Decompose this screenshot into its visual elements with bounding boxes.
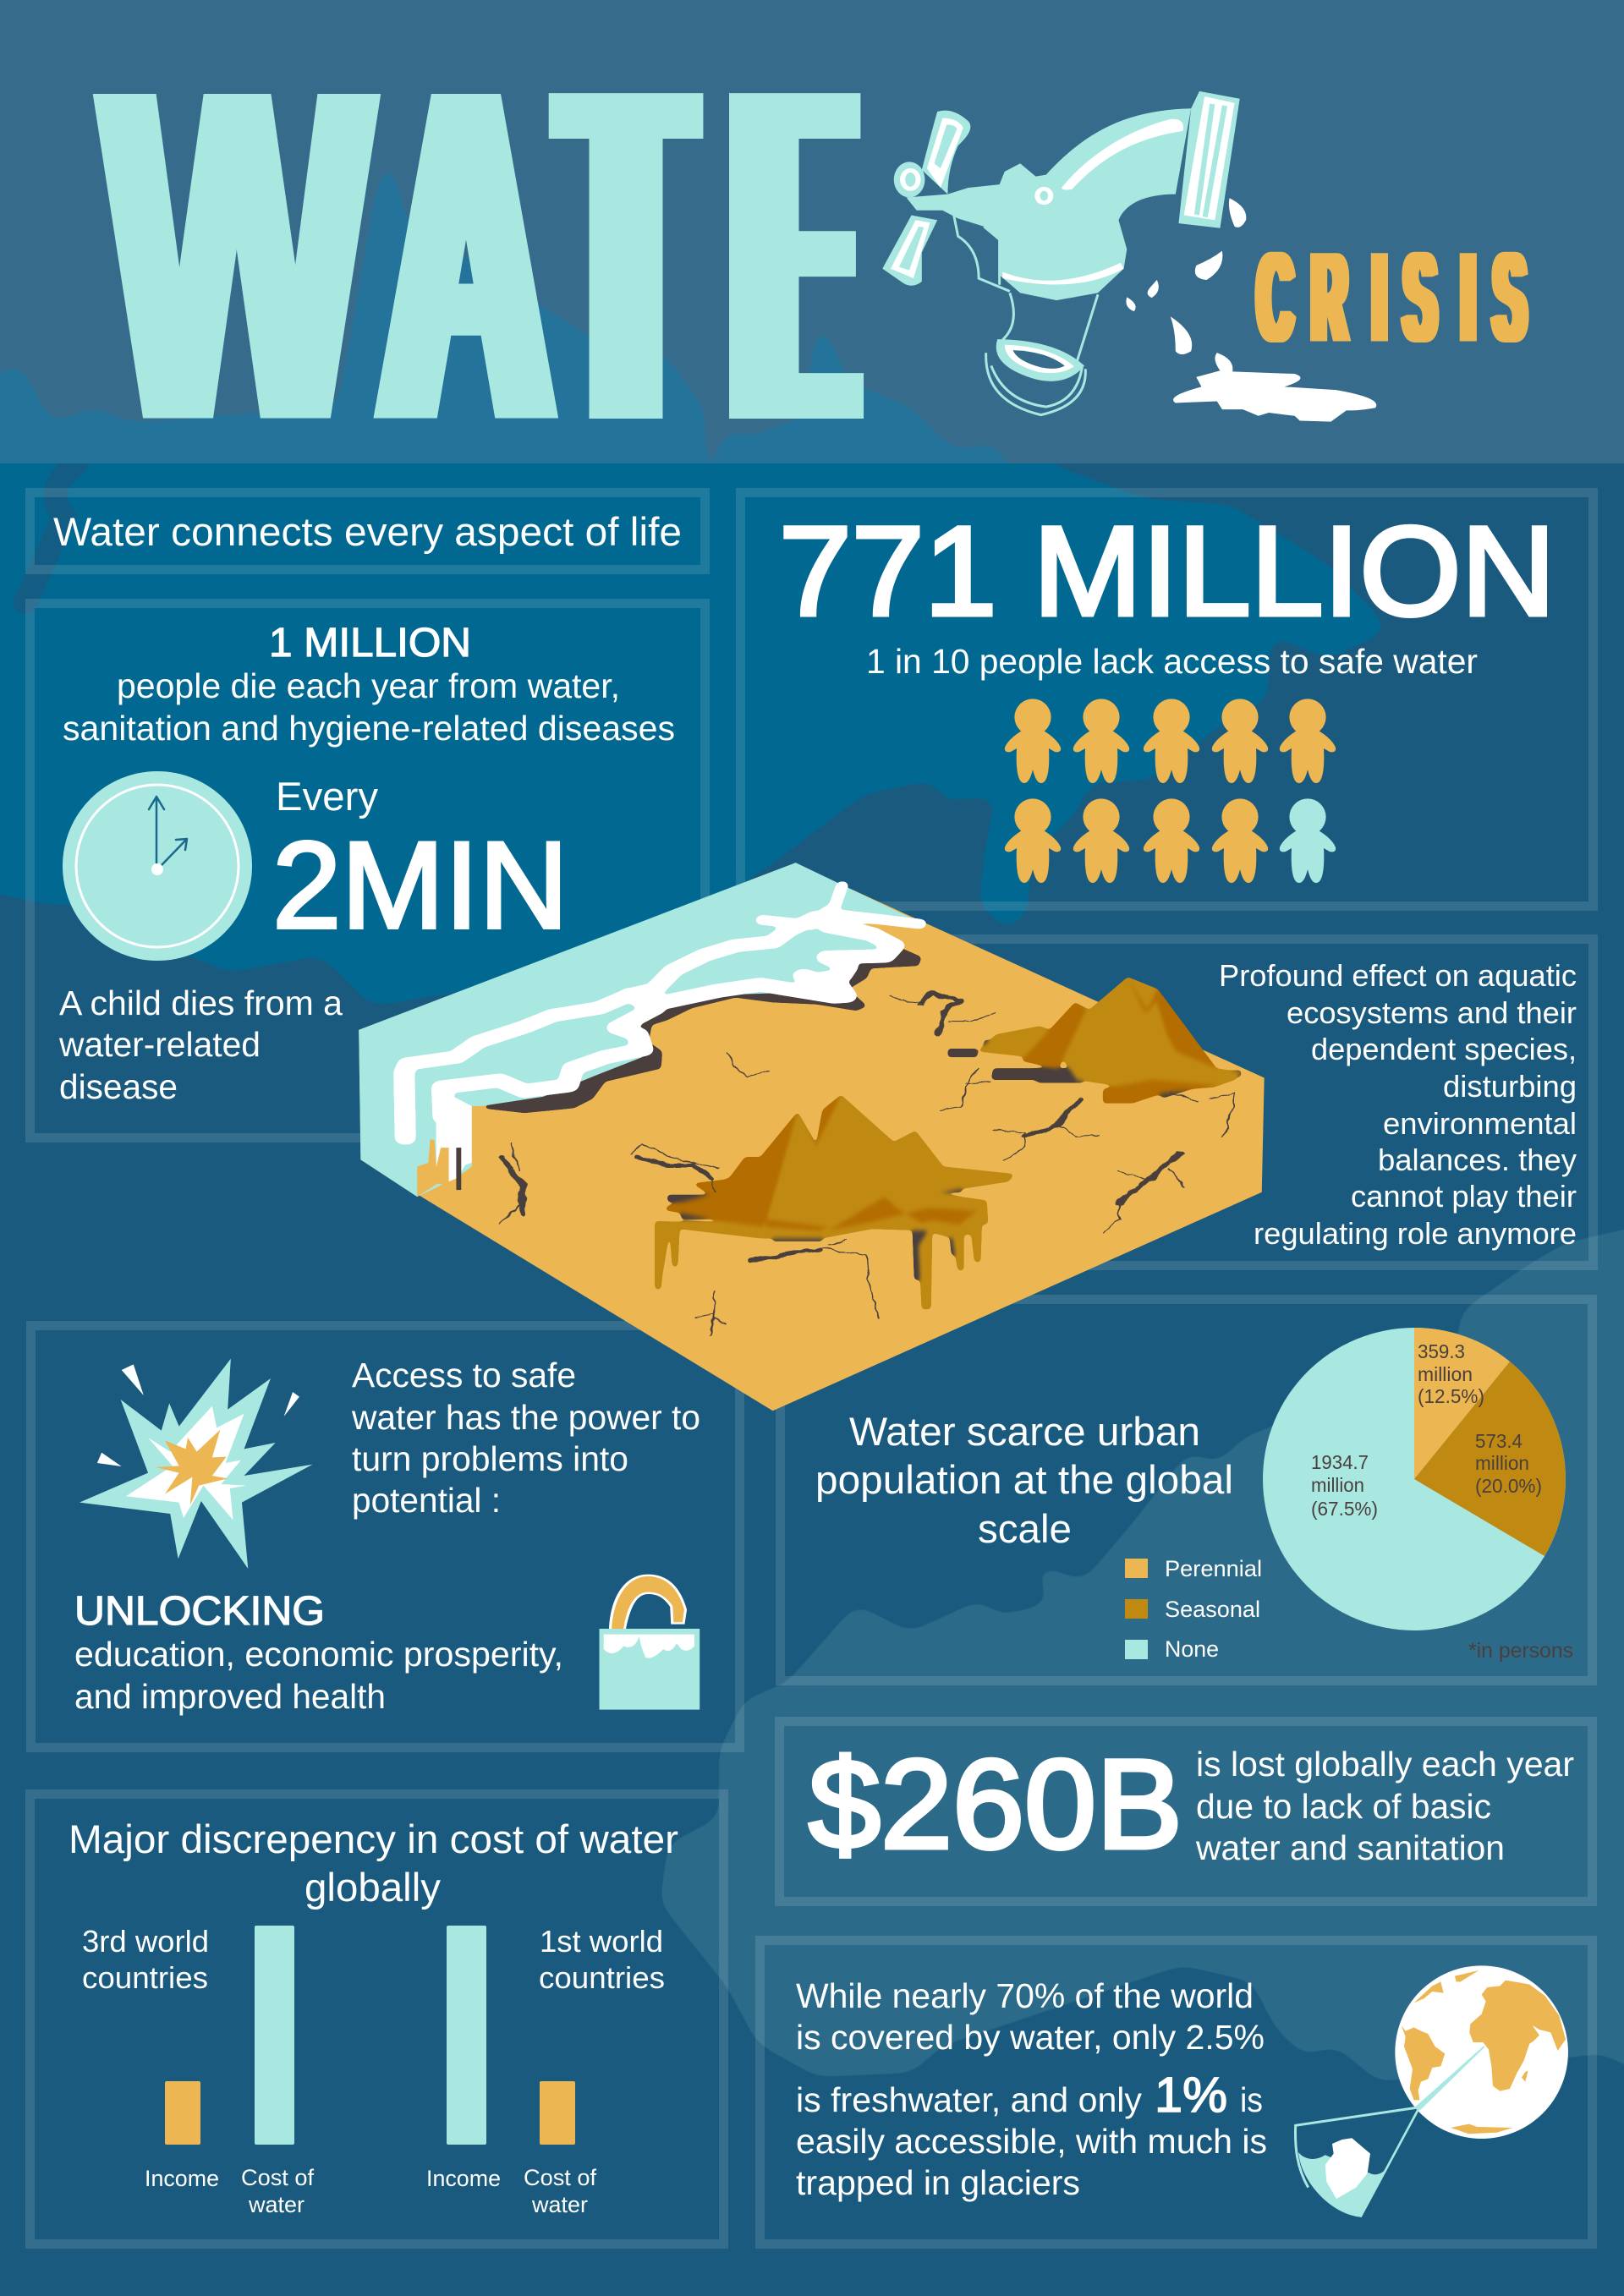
text: unlocking: and improved health (74, 1677, 386, 1716)
title: WATER: W (104, 0, 373, 518)
pictogram: 1 in 10 people (1005, 699, 1336, 883)
stat: $260B (809, 1733, 1574, 1875)
text: access to safe water (351, 1356, 700, 1520)
panel text: 1 million deaths (63, 621, 675, 748)
text: aquatic ecosystems: cannot play their (1351, 1179, 1577, 1214)
pie chart: water scarcity: (12.5%) (1418, 1385, 1484, 1407)
far mountain (947, 977, 1242, 1103)
bar chart: 3rd world countries: water (248, 2192, 304, 2217)
text: aquatic ecosystems: regulating role anymore (1254, 1216, 1577, 1251)
text: aquatic ecosystems: disturbing (1443, 1069, 1577, 1104)
bar chart: 3rd world countries: countries (82, 1960, 208, 1995)
title: WATER: A (383, 0, 549, 518)
title: WATER (104, 0, 846, 527)
text: freshwater facts (796, 1976, 1267, 2202)
text: freshwater facts: While nearly 70% of the world (796, 1976, 1254, 2015)
pie chart: water scarcity: (67.5%) (1311, 1498, 1378, 1520)
text: unlocking: education, economic prosperity, (74, 1635, 563, 1674)
text: access to safe water: Access to safe (352, 1356, 576, 1395)
bar chart: 3rd world countries (82, 1924, 314, 2217)
stat: $260B: is lost globally each year (1196, 1745, 1574, 1784)
text: aquatic ecosystems: environmental (1383, 1106, 1577, 1141)
pie chart: water scarcity: million (1311, 1474, 1364, 1496)
text: access to safe water: potential : (352, 1481, 501, 1520)
panel text: 1 million deaths: 1 MILLION (269, 621, 471, 666)
heading: water scarce urban population: population at the global (815, 1458, 1233, 1503)
ground cracks (500, 993, 1235, 1335)
text: access to safe water: water has the power to (351, 1398, 700, 1437)
text: access to safe water: turn problems into (352, 1439, 628, 1478)
footnote: in persons: *in persons (1468, 1639, 1573, 1663)
pie chart: water scarcity: million (1418, 1363, 1473, 1385)
isometric land block: ice melting over drought (359, 863, 1265, 1411)
heading: water scarce urban population: scale (978, 1507, 1072, 1552)
stat: 771 million: 1 in 10 people lack access to safe water (866, 642, 1478, 681)
icon: clock at two minutes (63, 771, 252, 961)
panel frames (30, 492, 1594, 2244)
text: freshwater facts: is covered by water, only 2.5% (796, 2018, 1265, 2057)
icon: globe with glacier inset (1295, 1965, 1568, 2217)
heading: water scarce urban population: Water scarce urban (849, 1410, 1200, 1455)
bar chart: 1st world countries: Income (426, 2166, 501, 2191)
pie chart: water scarcity: (20.0%) (1475, 1475, 1542, 1497)
bar chart: 1st world countries: 1st world (540, 1924, 663, 1959)
bar chart: 1st world countries: countries (539, 1960, 665, 1995)
text: aquatic ecosystems: Profound effect on aquatic (1219, 958, 1577, 993)
heading: water connects every aspect of life: Water connects every aspect of life (53, 510, 682, 555)
heading: major discrepancy (69, 1817, 678, 1910)
pie legend: Perennial (1165, 1556, 1262, 1581)
stat: $260B: $260B (809, 1733, 1182, 1875)
title: WATER: T (570, 0, 682, 526)
text: freshwater facts: is freshwater, and only (796, 2080, 1142, 2119)
title: WATER: E (743, 0, 846, 527)
icon: open padlock (600, 1575, 700, 1710)
text: a child dies: disease (59, 1067, 178, 1106)
heading: water scarce urban population (815, 1410, 1233, 1552)
near mountain (655, 1095, 1015, 1309)
bar chart: 3rd world countries: 3rd world (82, 1924, 209, 1959)
pie chart: water scarcity (1263, 1328, 1566, 1630)
text: aquatic ecosystems: ecosystems and their (1287, 995, 1577, 1030)
stat: every 2 min: Every (276, 774, 379, 819)
text: freshwater facts: trapped in glaciers (796, 2163, 1080, 2202)
bar chart: 3rd world countries: Income (145, 2166, 219, 2191)
text: unlocking (74, 1589, 563, 1716)
text: aquatic ecosystems (1219, 958, 1577, 1251)
text: freshwater facts: is (1240, 2080, 1263, 2119)
pie chart: water scarcity: 1934.7 (1311, 1451, 1369, 1473)
pie legend: Seasonal (1165, 1597, 1260, 1622)
text: a child dies: A child dies from a (59, 984, 343, 1022)
stat: $260B: due to lack of basic (1196, 1787, 1491, 1826)
heading: major discrepancy: globally (304, 1866, 441, 1910)
bar chart: 1st world countries: Cost of (524, 2165, 596, 2190)
bar chart: 1st world countries (426, 1924, 665, 2217)
panel text: 1 million deaths: people die each year from water, (117, 666, 620, 705)
icon: explosion (80, 1359, 313, 1569)
stat: 771 million: 771 MILLION (779, 500, 1555, 642)
pie chart: water scarcity: 573.4 (1475, 1430, 1522, 1452)
stat: $260B: water and sanitation (1195, 1828, 1505, 1867)
pie chart: water scarcity: 359.3 (1418, 1340, 1465, 1362)
title: CRISIS: CRISIS (1258, 227, 1526, 369)
icon: faucet with water drops (882, 91, 1376, 422)
text: aquatic ecosystems: balances. they (1378, 1143, 1577, 1177)
text: a child dies (58, 984, 343, 1106)
heading: major discrepancy: Major discrepency in cost of water (69, 1817, 678, 1862)
panel text: 1 million deaths: sanitation and hygiene-related diseases (63, 709, 675, 748)
pie chart: water scarcity: million (1475, 1452, 1529, 1474)
text: aquatic ecosystems: dependent species, (1311, 1032, 1577, 1066)
bar chart: 3rd world countries: Cost of (241, 2165, 314, 2190)
bar chart: 1st world countries: water (531, 2192, 588, 2217)
stat: every 2 min: 2MIN (272, 816, 568, 954)
pie legend: None (1165, 1636, 1219, 1662)
text: unlocking: UNLOCKING (74, 1589, 325, 1634)
text: freshwater facts: easily accessible, with much is (796, 2122, 1267, 2161)
text: freshwater facts: 1% (1155, 2068, 1227, 2123)
text: a child dies: water-related (58, 1025, 261, 1064)
pie legend (1125, 1556, 1262, 1662)
